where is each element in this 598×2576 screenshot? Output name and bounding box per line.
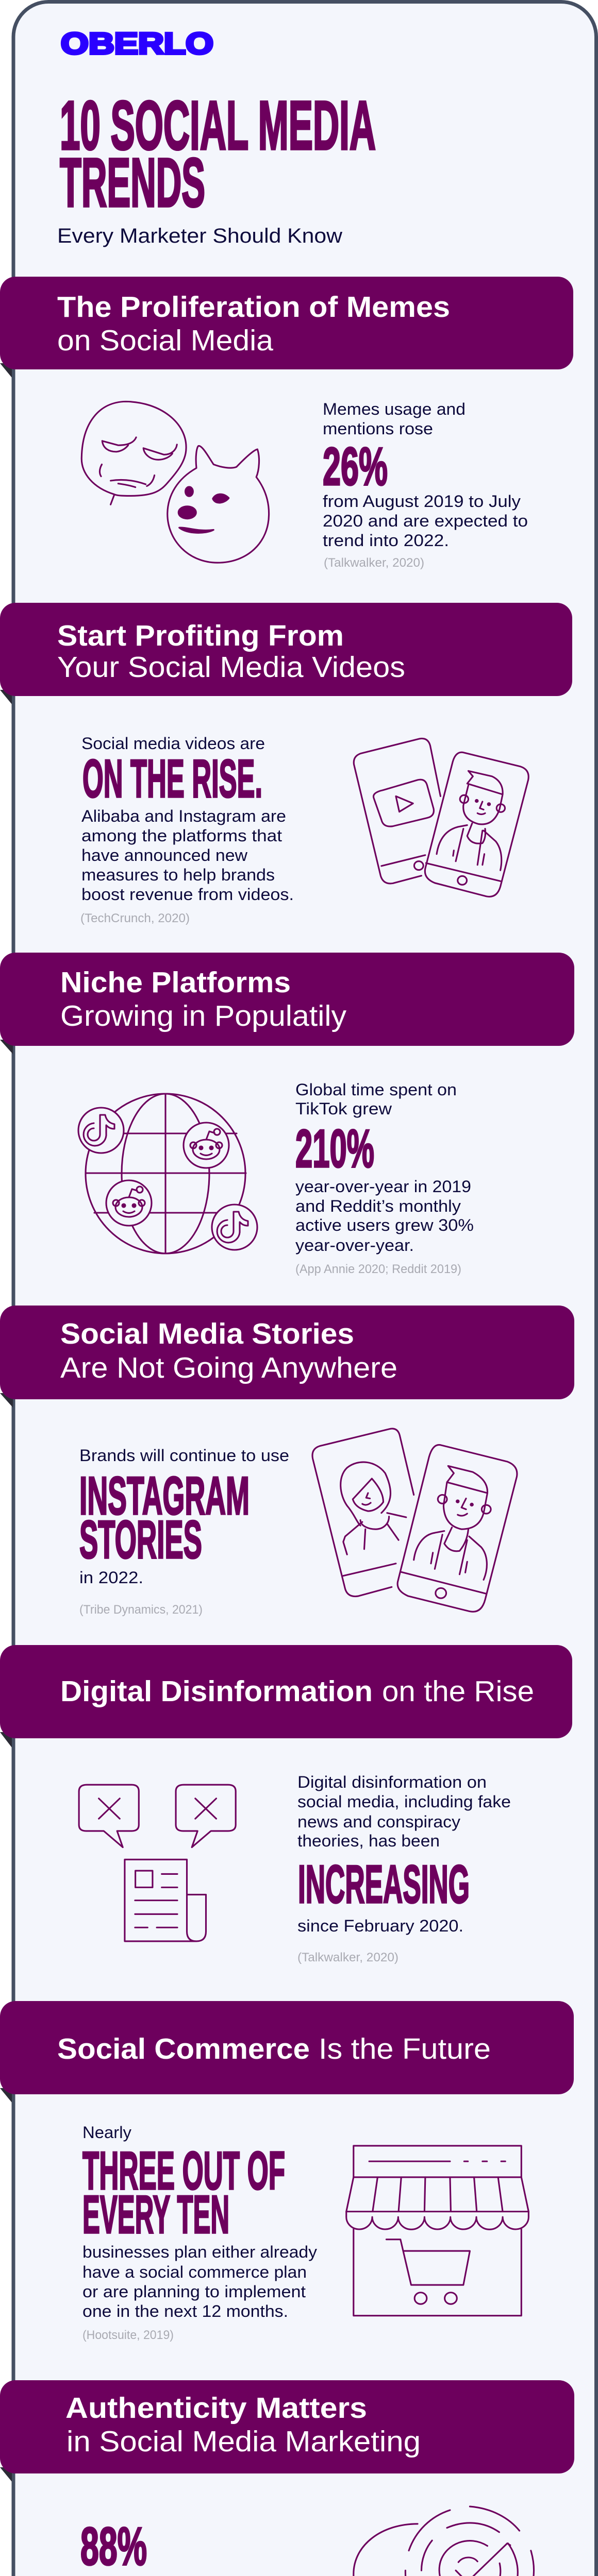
icon: globe with TikTok and Reddit badges: [78, 1094, 257, 1253]
stat text: disinformation: [297, 1773, 511, 1964]
stat text: videos: boost revenue from videos.: [81, 885, 294, 904]
subtitle: Every Marketer Should Know: [57, 225, 342, 247]
section 4: stories: [0, 1306, 574, 1617]
banner: authenticity heading: Authenticity Matters: [65, 2392, 367, 2425]
stat text: memes: mentions rose: [323, 419, 433, 438]
stat text: social commerce: [82, 2123, 317, 2342]
stat text: niche platforms: and Reddit’s monthly: [295, 1197, 461, 1215]
stat text: niche platforms: TikTok grew: [295, 1099, 392, 1118]
stat text: disinformation: since February 2020.: [297, 1917, 463, 1935]
stat text: niche platforms: (App Annie 2020; Reddit 2019): [295, 1262, 461, 1276]
icon: speech bubbles and newspaper: [79, 1785, 236, 1941]
banner: niche platforms heading: Growing in Populatily: [60, 999, 347, 1032]
stat text: social commerce: EVERY TEN: [82, 2185, 229, 2245]
banner: social commerce heading: [0, 2001, 574, 2103]
banner: authenticity heading: [0, 2380, 574, 2482]
banner: niche platforms heading: Niche Platforms: [60, 966, 291, 999]
icon: storefront with cart: [346, 2146, 528, 2316]
banner: stories heading: Are Not Going Anywhere: [60, 1351, 397, 1384]
banner: niche platforms heading: [0, 953, 574, 1054]
icon: phones with two people: [312, 1429, 517, 1612]
icon: head with target and check: [354, 2506, 534, 2576]
title: TRENDS: [60, 144, 205, 222]
stat text: disinformation: Digital disinformation on: [297, 1773, 487, 1791]
stat text: memes: [323, 400, 528, 570]
banner: disinformation heading: [0, 1645, 572, 1748]
stat text: social commerce: (Hootsuite, 2019): [82, 2328, 174, 2342]
stat text: social commerce: THREE OUT OF: [82, 2141, 285, 2201]
stat text: stories: Brands will continue to use: [79, 1446, 289, 1465]
stat text: stories: STORIES: [79, 1510, 202, 1570]
banner: stories heading: [0, 1306, 574, 1408]
stat text: stories: [79, 1446, 289, 1617]
icon: meme faces: [81, 401, 269, 563]
stat text: niche platforms: [295, 1080, 474, 1276]
stat text: memes: 2020 and are expected to: [323, 512, 528, 530]
stat text: memes: trend into 2022.: [323, 531, 449, 550]
stat text: memes: from August 2019 to July: [323, 492, 521, 511]
section 5: disinformation: [0, 1645, 572, 1964]
stat text: stories: INSTAGRAM: [79, 1466, 250, 1526]
banner: disinformation heading: Digital Disinformation: [60, 1675, 373, 1708]
banner: disinformation heading: on the Rise: [382, 1675, 534, 1708]
stat text: disinformation: (Talkwalker, 2020): [297, 1951, 398, 1964]
banner: social commerce heading: Is the Future: [319, 2032, 491, 2065]
stat text: videos: have announced new: [81, 846, 248, 865]
stat text: social commerce: Nearly: [82, 2123, 131, 2142]
stat text: social commerce: or are planning to implement: [82, 2282, 306, 2301]
banner: videos heading: [0, 603, 572, 704]
banner: social commerce heading: Social Commerce: [57, 2032, 310, 2065]
stat text: disinformation: news and conspiracy: [297, 1812, 460, 1831]
stat text: stories: (Tribe Dynamics, 2021): [79, 1603, 203, 1617]
stat text: videos: ON THE RISE.: [82, 749, 262, 809]
stat text: niche platforms: active users grew 30%: [295, 1216, 474, 1234]
stat text: videos: among the platforms that: [81, 826, 282, 845]
banner: memes heading: The Proliferation of Memes: [57, 291, 450, 324]
banner: authenticity heading: in Social Media Marketing: [67, 2425, 421, 2458]
stat text: social commerce: have a social commerce plan: [82, 2263, 307, 2281]
stat text: videos: Alibaba and Instagram are: [81, 807, 286, 825]
section 1: memes: [0, 277, 573, 570]
logo: Oberlo: OBERLO: [61, 27, 213, 61]
title: [60, 88, 376, 222]
stat text: memes: Memes usage and: [323, 400, 466, 418]
stat text: videos: [80, 734, 294, 925]
stat text: videos: measures to help brands: [81, 866, 275, 884]
banner: videos heading: Start Profiting From: [57, 619, 344, 652]
stat text: videos: Social media videos are: [81, 734, 265, 753]
banner: memes heading: [0, 277, 573, 378]
stat text: disinformation: social media, including fake: [297, 1792, 511, 1811]
stat text: niche platforms: year-over-year.: [295, 1236, 414, 1255]
section 7: authenticity: [0, 2380, 574, 2576]
stat text: videos: (TechCrunch, 2020): [80, 911, 190, 925]
banner: memes heading: on Social Media: [57, 324, 273, 357]
section 6: social commerce: [0, 2001, 574, 2342]
icon: phones with video and person: [354, 738, 528, 896]
stat text: stories: in 2022.: [79, 1568, 143, 1587]
stat text: niche platforms: year-over-year in 2019: [295, 1177, 471, 1196]
stat text: authenticity: 88%: [80, 2517, 147, 2576]
stat text: niche platforms: Global time spent on: [295, 1080, 457, 1099]
stat text: memes: (Talkwalker, 2020): [324, 556, 424, 570]
banner: videos heading: Your Social Media Videos: [57, 651, 405, 684]
section 2: videos: [0, 603, 572, 925]
stat text: memes: 26%: [323, 437, 388, 497]
stat text: social commerce: businesses plan either already: [82, 2243, 317, 2261]
stat text: niche platforms: 210%: [295, 1119, 374, 1179]
section 3: niche platforms: [0, 953, 574, 1276]
banner: stories heading: Social Media Stories: [60, 1317, 354, 1350]
stat text: social commerce: one in the next 12 months.: [82, 2302, 288, 2320]
stat text: disinformation: theories, has been: [297, 1832, 440, 1850]
